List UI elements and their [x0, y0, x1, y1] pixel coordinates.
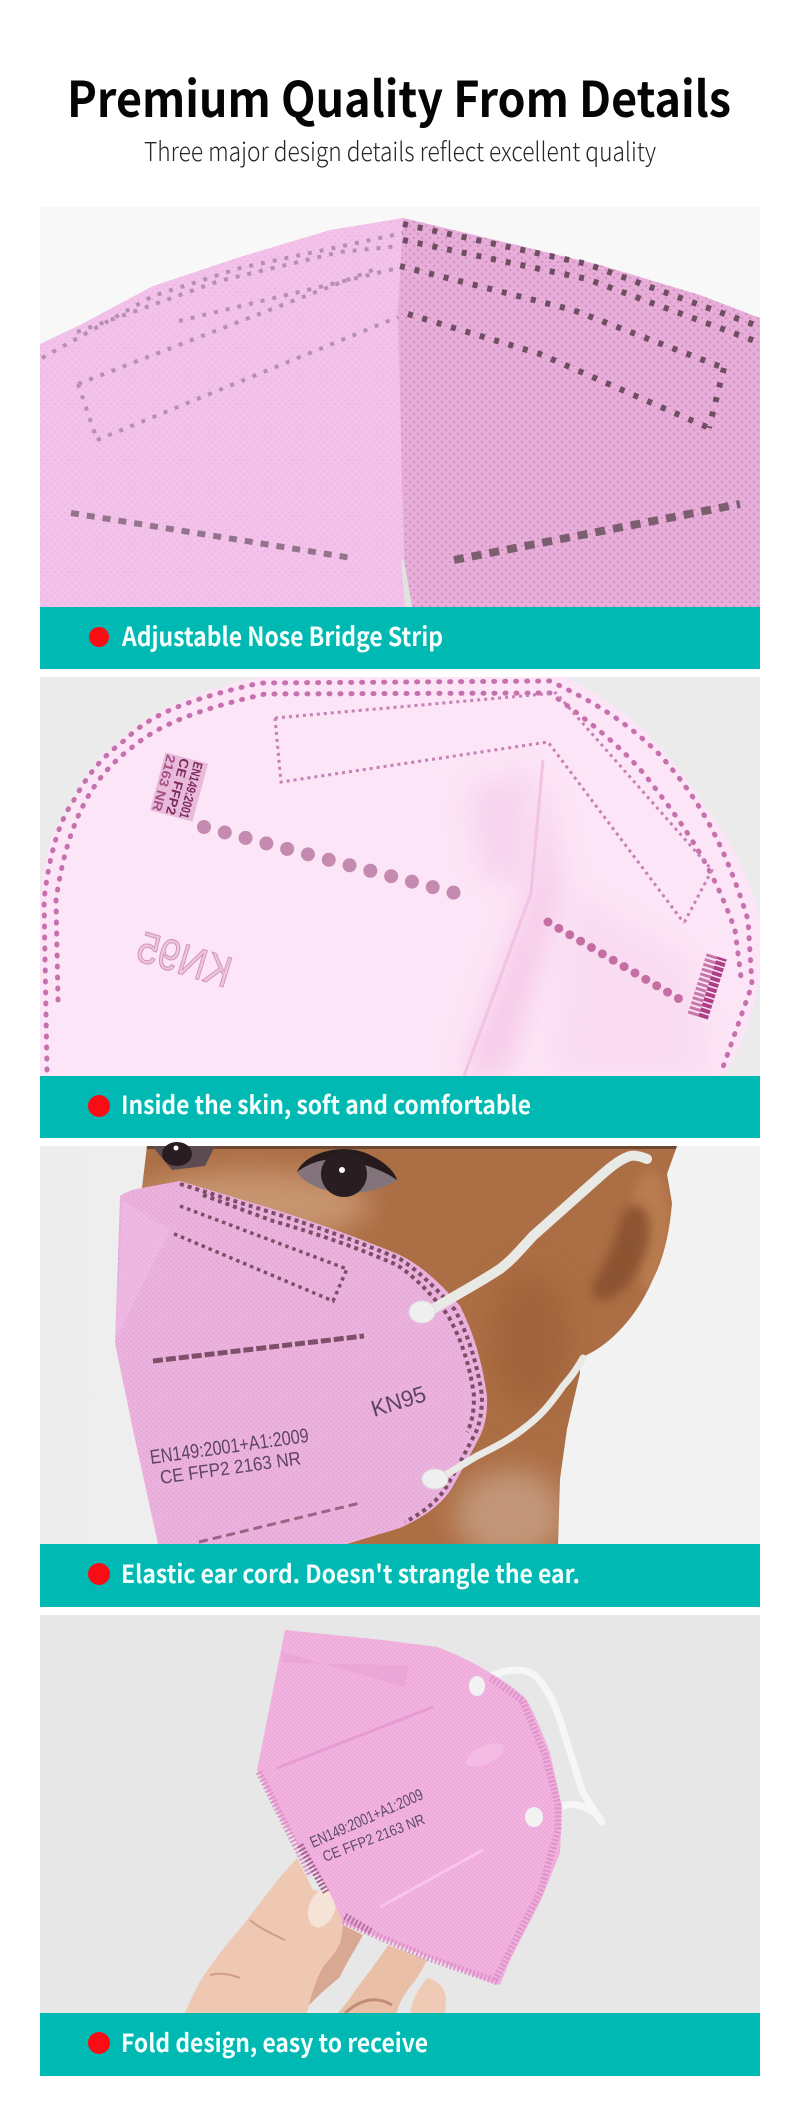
centre stitch: [153, 1336, 364, 1361]
emboss mark: [463, 1738, 507, 1772]
bullet: [89, 627, 109, 647]
stamp right: [693, 955, 722, 1018]
lower rim dark: [345, 1916, 372, 1932]
eye right: [297, 1149, 397, 1197]
caption text: Fold design, easy to receive: [121, 2024, 428, 2060]
stamp left: [149, 752, 208, 822]
fold highlight: [401, 560, 412, 607]
bullet: [88, 2032, 110, 2054]
panel: nose bridge strip: [40, 207, 760, 607]
mask interior: [40, 677, 760, 1076]
upper strip: [282, 1652, 408, 1687]
photo background: [40, 207, 760, 607]
caption text: Elastic ear cord. Doesn't strangle the ear.: [121, 1555, 580, 1591]
bullet: [88, 1563, 110, 1585]
stamp left: 2163 NR: [149, 753, 179, 814]
lower weld: [525, 1807, 543, 1827]
hand back fingers: [290, 1925, 446, 2013]
subtitle: Three major design details reflect excellent quality: [144, 132, 656, 169]
caption band 3: [40, 1544, 760, 1607]
mask body: [115, 1181, 487, 1544]
panel: elastic ear cord: [40, 1142, 760, 1560]
folded mask body: [257, 1630, 562, 1985]
title: Premium Quality From Details: [67, 61, 731, 132]
mask rim stitching: [180, 1184, 482, 1522]
mask light fold: [115, 1200, 170, 1340]
fold line: [464, 760, 543, 1076]
strong edge stitching: [300, 1845, 326, 1892]
centre stitch: [204, 827, 474, 898]
edge stitching right: [400, 224, 755, 428]
caption band 1: [40, 607, 760, 669]
photo background: [40, 1146, 760, 1544]
mask right face: [398, 218, 760, 607]
caption text: Adjustable Nose Bridge Strip: [121, 617, 443, 654]
strip stitching: [172, 1206, 347, 1301]
standard print line 1: EN149:2001+A1:2009: [308, 1786, 426, 1852]
lower stitch left: [71, 513, 352, 558]
rim stitching: [259, 1677, 558, 1982]
lower weld: [422, 1469, 448, 1489]
mirrored KN95 text: KN95: [131, 923, 237, 998]
edge stitching left: [42, 233, 403, 440]
caption band 2: [40, 1076, 760, 1138]
right stitch: [548, 922, 681, 1000]
lower ear cord: [447, 1358, 583, 1474]
panel: fold design: [40, 1615, 760, 2013]
upper weld: [469, 1676, 485, 1696]
finger creases: [210, 1920, 285, 1978]
upper weld: [409, 1301, 435, 1323]
upper ear cord: [433, 1156, 647, 1309]
ear inner shadow: [592, 1205, 649, 1300]
standard print line 1: EN149:2001+A1:2009: [149, 1425, 310, 1469]
strip stitching: [275, 693, 712, 923]
lower stitch right: [454, 504, 740, 560]
eye left: [152, 1142, 215, 1170]
KN95 print: KN95: [368, 1381, 429, 1422]
stamp left: EN149:2001: [176, 760, 206, 820]
standard print line 2: CE FFP2 2163 NR: [159, 1448, 302, 1489]
bullet: [88, 1095, 110, 1117]
interior fold shading: [465, 776, 687, 1076]
stamp left: CE FFP2: [163, 757, 192, 817]
head with shading: [130, 1146, 690, 1560]
caption band 4: [40, 2013, 760, 2076]
rim stitching: [44, 681, 752, 1070]
lower stitch: [199, 1503, 360, 1542]
photo background: [40, 677, 760, 1076]
photo background: [40, 1615, 760, 2013]
mask left face: [40, 218, 410, 607]
caption text: Inside the skin, soft and comfortable: [121, 1086, 531, 1122]
upper fold: [277, 1707, 433, 1768]
ear cord: [483, 1670, 602, 1822]
thumbnail: [303, 1885, 341, 1931]
panel: inside skin: [40, 677, 760, 1076]
standard print line 2: CE FFP2 2163 NR: [320, 1811, 427, 1866]
lower fold: [380, 1850, 483, 1907]
hand palm and finger: [185, 1858, 343, 2013]
